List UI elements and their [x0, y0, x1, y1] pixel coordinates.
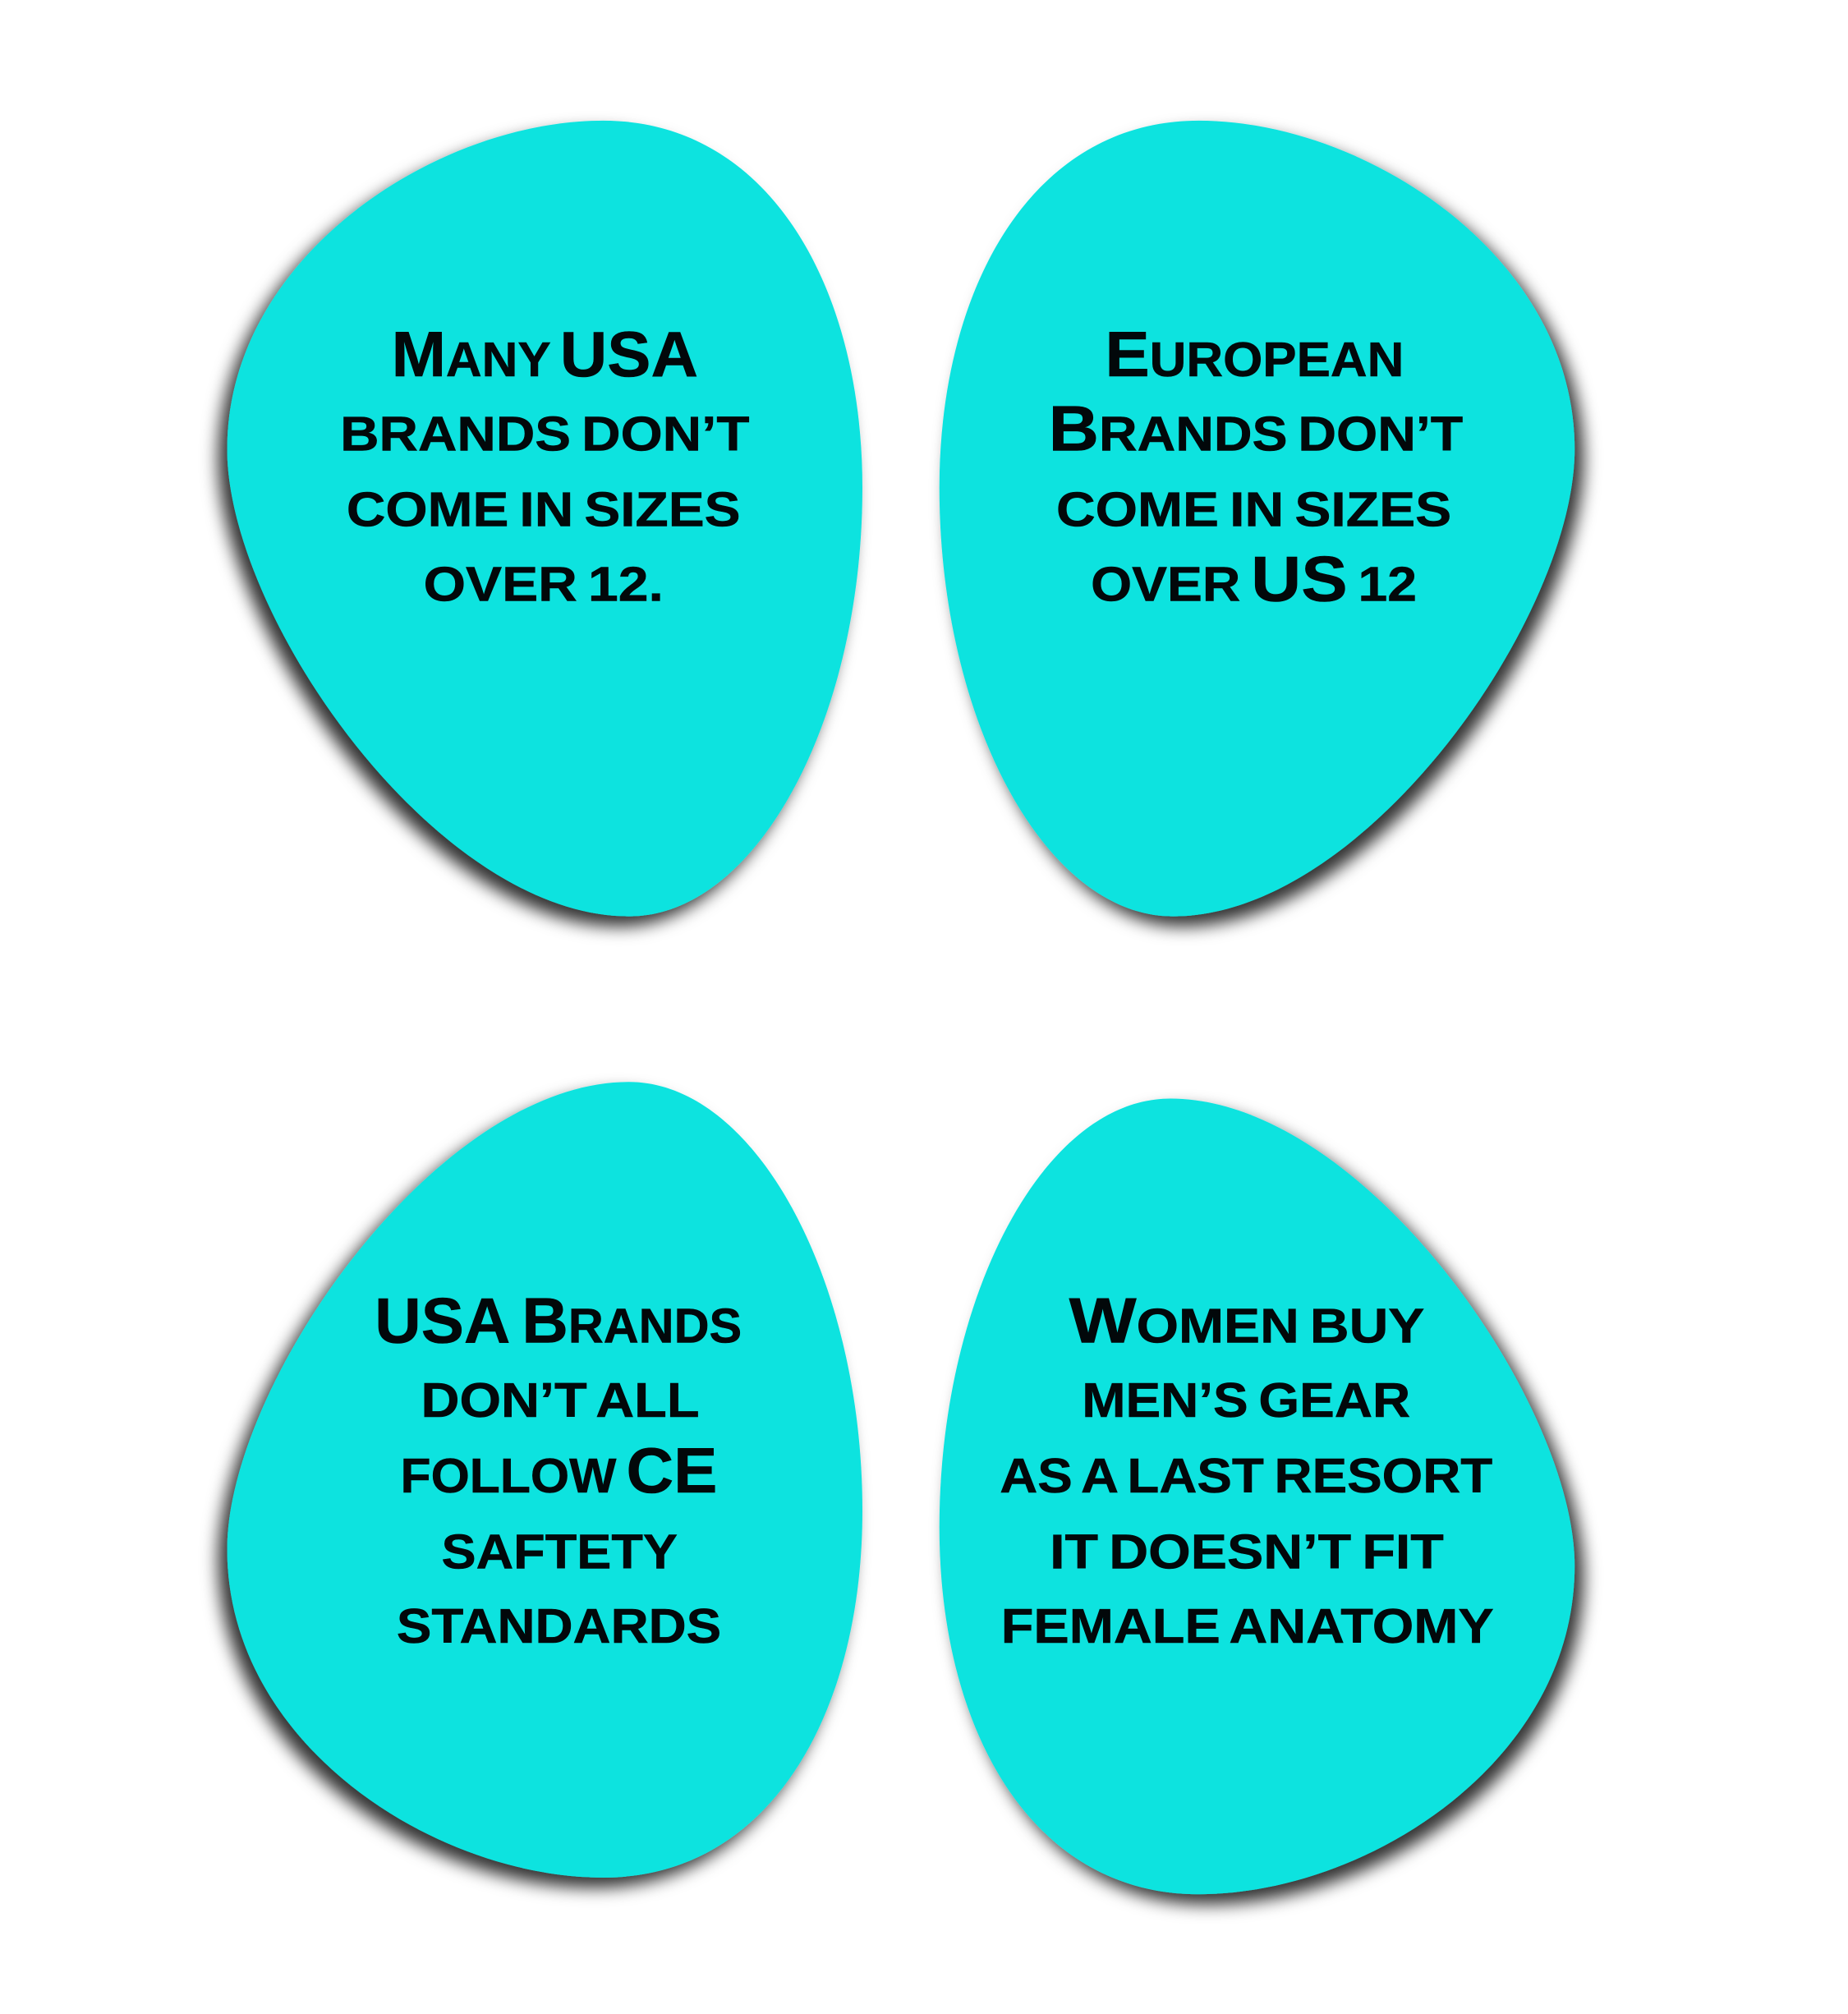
panel: European brands	[940, 121, 1574, 917]
text: European brands don't come in sizes over US 12: OVER US 12	[1091, 542, 1417, 614]
text: Women buy men's gear as a last resort it doesn't fit female anatomy: MEN’S GEAR	[1082, 1373, 1410, 1428]
blob: top right	[940, 121, 1574, 917]
panel: USA brands CE safety	[228, 1082, 862, 1878]
text: Women buy men's gear as a last resort it doesn't fit female anatomy: WOMEN BUY	[1069, 1284, 1424, 1356]
text: Women buy men's gear as a last resort it doesn't fit female anatomy: AS A LAST RESORT	[1000, 1448, 1492, 1503]
text: Many USA brands don't come in sizes over 12: BRANDS DON’T	[340, 406, 750, 461]
panel: Many USA brands	[228, 121, 862, 917]
text: USA Brands don't all follow CE saftety standards: DON’T ALL	[421, 1373, 700, 1428]
text: USA Brands don't all follow CE saftety standards: STANDARDS	[397, 1598, 721, 1653]
text: USA Brands don't all follow CE saftety standards: USA BRANDS	[375, 1284, 742, 1356]
text: USA Brands don't all follow CE saftety standards: FOLLOW CE	[401, 1434, 717, 1506]
blob: top left	[228, 121, 862, 917]
text: USA Brands don't all follow CE saftety standards	[375, 1284, 742, 1653]
text: Many USA brands don't come in sizes over 12: COME IN SIZES	[347, 482, 741, 537]
blob: bottom left	[228, 1082, 862, 1878]
text: Women buy men's gear as a last resort it doesn't fit female anatomy: FEMALE ANATOMY	[1001, 1598, 1494, 1653]
text: Many USA brands don't come in sizes over 12	[340, 318, 749, 611]
text: Many USA brands don't come in sizes over 12: MANY USA	[392, 318, 698, 390]
blob: bottom right	[940, 1099, 1574, 1894]
panel: Women buy men's gear	[940, 1099, 1574, 1894]
text: USA Brands don't all follow CE saftety standards: SAFTETY	[442, 1524, 678, 1579]
text: Many USA brands don't come in sizes over 12: OVER 12.	[424, 556, 664, 611]
text: Women buy men's gear as a last resort it doesn't fit female anatomy: IT DOESN’T FIT	[1050, 1524, 1444, 1579]
text: European brands don't come in sizes over US 12: BRANDS DON’T	[1049, 392, 1463, 464]
text: European brands don't come in sizes over US 12: EUROPEAN	[1105, 318, 1404, 390]
text: European brands don't come in sizes over US 12	[1049, 318, 1463, 614]
text: Women buy men's gear as a last resort it doesn't fit female anatomy	[1000, 1284, 1494, 1653]
text: European brands don't come in sizes over US 12: COME IN SIZES	[1056, 482, 1451, 537]
